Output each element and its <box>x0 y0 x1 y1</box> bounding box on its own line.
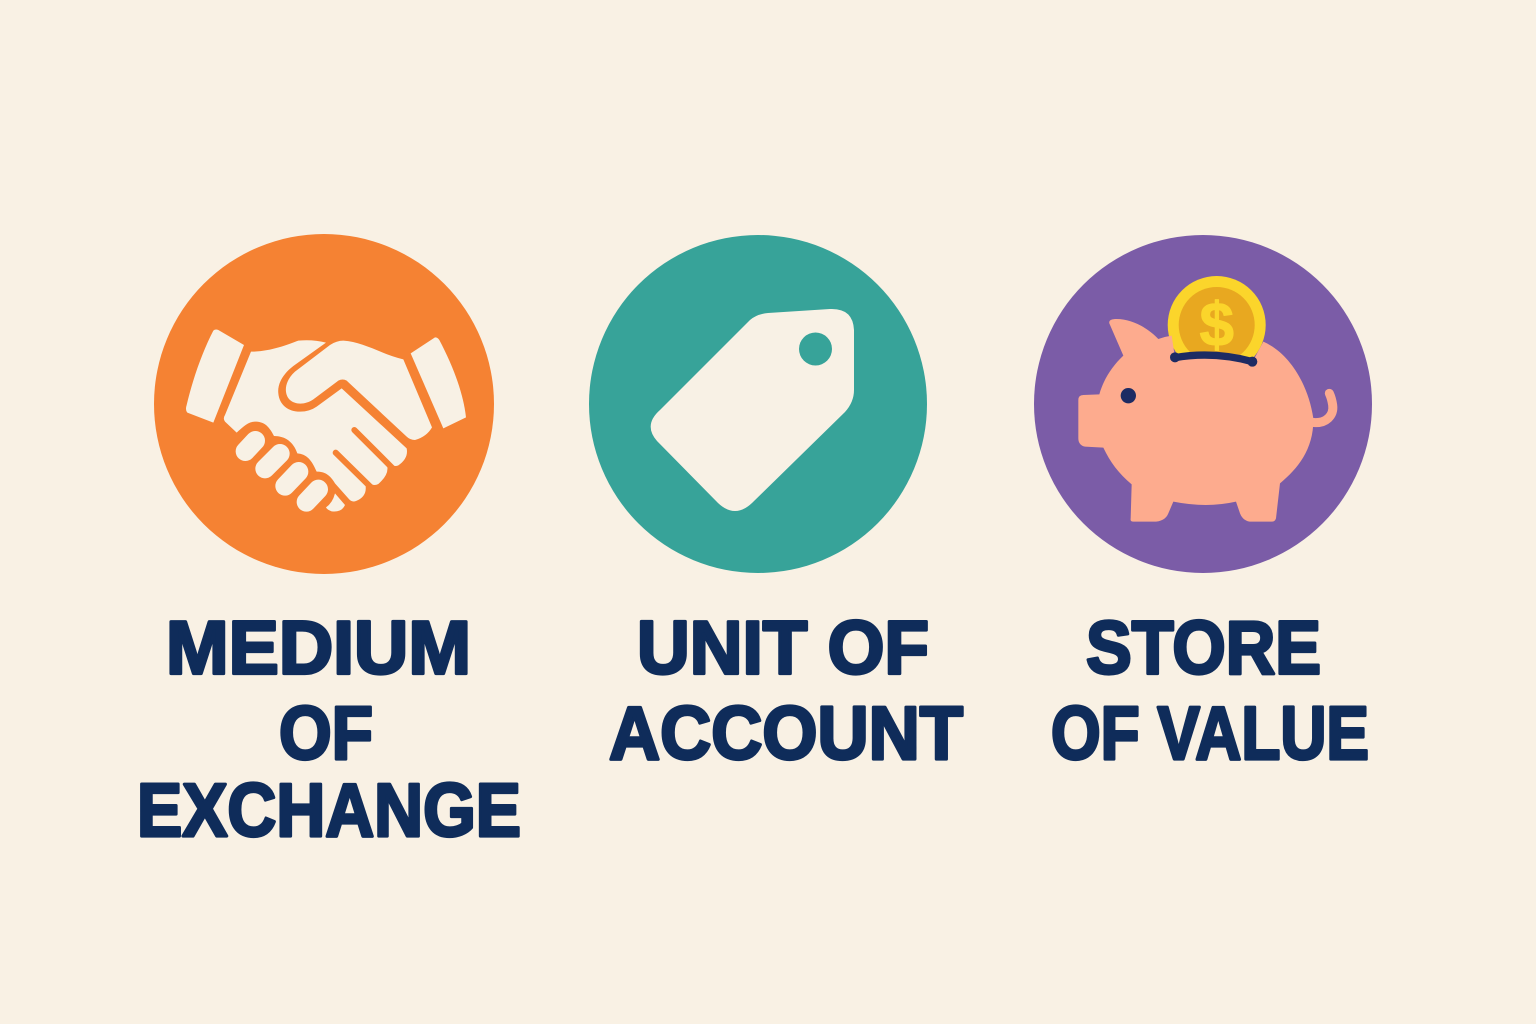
panel: store of value <box>1034 235 1372 775</box>
label: unit of account: ACCOUNT <box>609 691 963 775</box>
coin <box>1168 276 1266 374</box>
label: store of value <box>1051 606 1369 775</box>
label: unit of account: UNIT OF <box>637 606 929 690</box>
coin: $ <box>1199 291 1234 360</box>
panel: unit of account <box>589 235 963 775</box>
label: medium of exchange: MEDIUM <box>166 606 471 690</box>
finger gaps <box>336 430 393 487</box>
panel: medium of exchange <box>137 234 521 852</box>
label: medium of exchange: EXCHANGE <box>137 768 521 852</box>
label: medium of exchange: OF <box>279 691 373 775</box>
label: store of value: OF VALUE <box>1051 691 1369 775</box>
icon: handshake <box>186 329 466 512</box>
label: medium of exchange <box>137 606 521 852</box>
icon circle: purple <box>1034 235 1372 573</box>
icon: price tag <box>651 309 854 511</box>
icon circle: teal <box>589 235 927 573</box>
pig <box>1078 319 1333 522</box>
label: unit of account <box>609 606 963 775</box>
icon: piggy bank with coin <box>1078 276 1333 522</box>
label: store of value: STORE <box>1086 606 1321 690</box>
gripping fingers <box>245 441 318 502</box>
icon circle: orange <box>154 234 494 574</box>
